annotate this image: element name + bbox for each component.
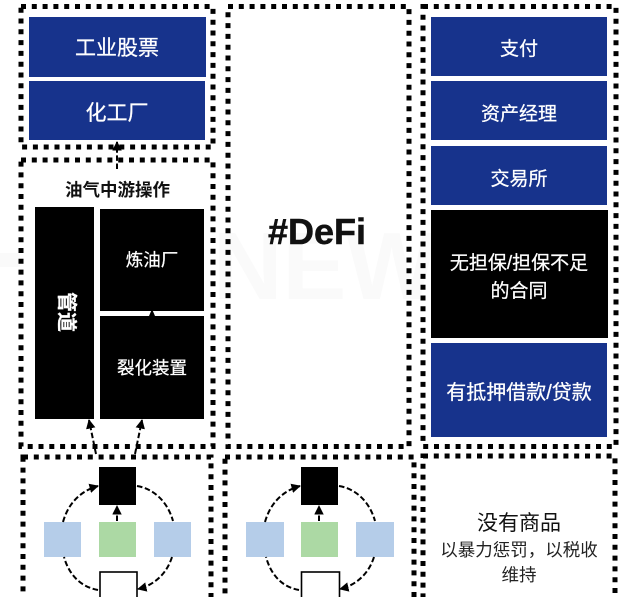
block: chemical plant: 化工厂 bbox=[86, 102, 148, 125]
text: enforced by violence, sustained by taxes: 以暴力惩罚，以税收 bbox=[440, 540, 598, 560]
box: blue right bbox=[356, 522, 394, 557]
block: industrial stocks bbox=[29, 17, 206, 77]
block: pipelines: 管道 bbox=[55, 292, 78, 332]
arrow: blue right to white bbox=[340, 557, 374, 589]
arrow: left diagram to cracker bbox=[135, 420, 142, 454]
arrow: white to blue left bbox=[64, 557, 98, 590]
arrow: green to black bbox=[318, 506, 320, 521]
block: collateralized lending: 有抵押借款/贷款 bbox=[446, 381, 592, 404]
arrow: green to black bbox=[116, 506, 118, 521]
arrow: blue left to black bbox=[63, 486, 98, 522]
arrow: left diagram to pipelines bbox=[89, 420, 96, 454]
block: exchanges bbox=[431, 146, 607, 205]
box: blue left bbox=[246, 522, 284, 557]
block: pipelines bbox=[35, 207, 94, 419]
arrow: black to blue right bbox=[339, 486, 375, 521]
box: blue left bbox=[44, 522, 81, 557]
box: green center bbox=[99, 522, 136, 557]
block: exchanges: 交易所 bbox=[490, 168, 548, 190]
text: enforced by violence, sustained by taxes bbox=[440, 540, 598, 585]
block: cracker bbox=[100, 316, 204, 419]
arrow: midstream to chemical plant bbox=[116, 142, 118, 169]
panel: DeFi center bbox=[228, 6, 409, 446]
watermark: NEW bbox=[213, 213, 437, 320]
heading: midstream operations: 油气中游操作 bbox=[65, 180, 170, 200]
heading: no commodity: 没有商品 bbox=[477, 512, 561, 535]
box: blue right bbox=[154, 522, 191, 557]
arrow: blue right to white bbox=[138, 557, 172, 589]
arrow: blue left to black bbox=[265, 486, 300, 522]
arrow: white to blue left bbox=[266, 557, 299, 590]
block: chemical plant bbox=[29, 81, 205, 140]
block: payments: 支付 bbox=[500, 38, 538, 60]
panel: left cycle diagram bbox=[23, 457, 211, 597]
block: uncollateralized contracts: 的合同 bbox=[490, 280, 548, 302]
block: refinery: 炼油厂 bbox=[126, 250, 178, 270]
watermark bbox=[0, 213, 437, 320]
text: enforced by violence, sustained by taxes: 维持 bbox=[502, 565, 536, 585]
box: white bottom bbox=[100, 572, 137, 597]
title: #DeFi: #DeFi bbox=[268, 211, 366, 252]
box: black top bbox=[301, 467, 338, 505]
arrow: black to blue right bbox=[137, 486, 173, 521]
panel: oil and gas midstream operations bbox=[21, 160, 213, 446]
block: refinery bbox=[100, 209, 204, 311]
block: cracker: 裂化装置 bbox=[117, 358, 187, 378]
block: asset managers bbox=[431, 81, 607, 140]
block: industrial stocks: 工业股票 bbox=[75, 37, 159, 60]
panel: middle cycle diagram bbox=[225, 457, 414, 597]
box: white bottom bbox=[302, 572, 340, 597]
block: uncollateralized contracts: 无担保/担保不足 bbox=[450, 252, 588, 274]
block: collateralized lending bbox=[431, 343, 607, 437]
block: payments bbox=[431, 17, 607, 76]
box: green center bbox=[301, 522, 338, 557]
panel: DeFi applications bbox=[423, 6, 616, 446]
arrow: cracker to refinery bbox=[149, 309, 155, 316]
panel: industrial equities and chemical plant bbox=[21, 6, 213, 147]
panel: no commodity bbox=[423, 456, 615, 597]
block: uncollateralized contracts bbox=[431, 210, 608, 338]
block: asset managers: 资产经理 bbox=[481, 103, 557, 125]
box: black top bbox=[99, 467, 136, 505]
